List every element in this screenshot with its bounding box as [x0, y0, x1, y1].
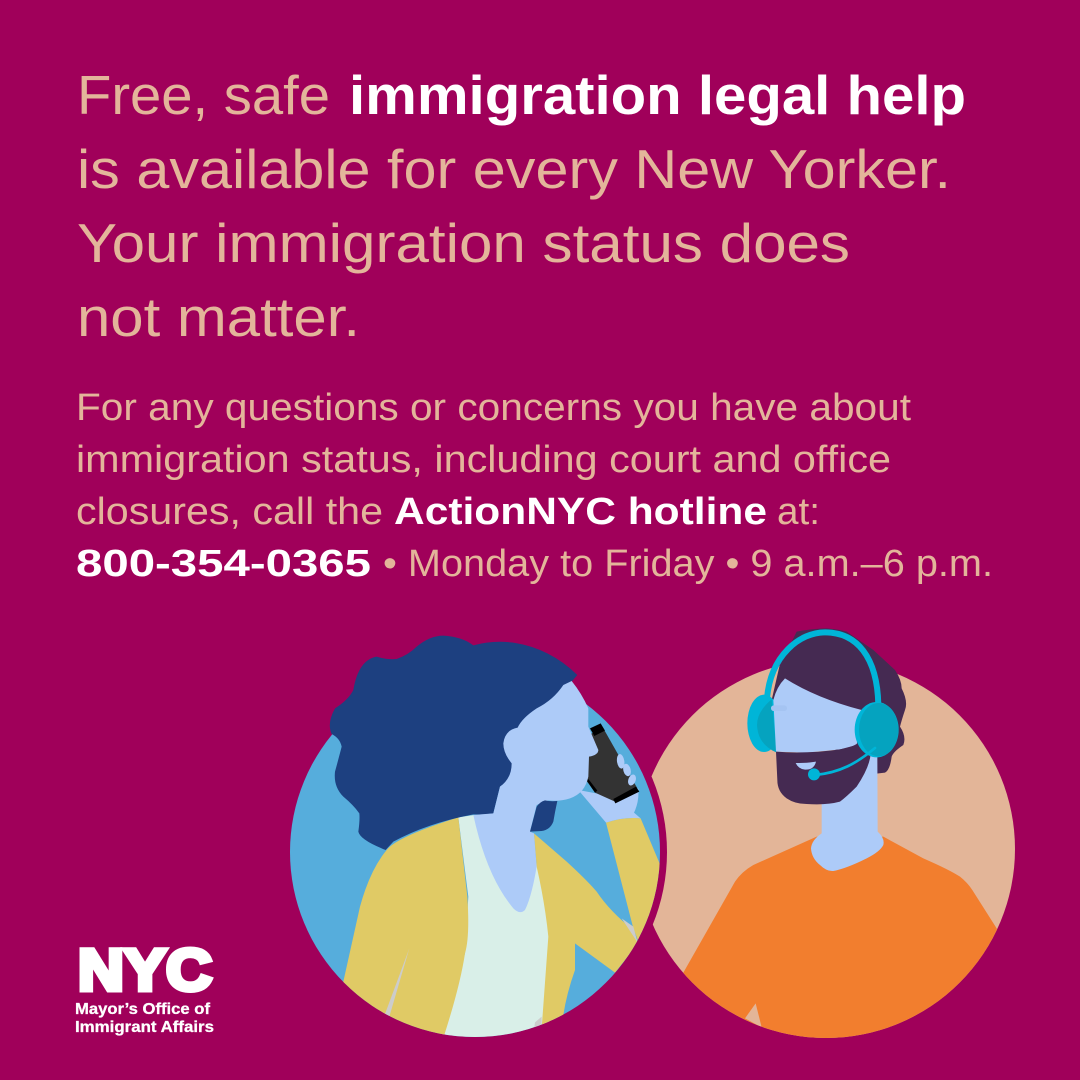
eyebrow detail: [771, 705, 787, 711]
headset: [767, 632, 899, 780]
collar hair: [530, 800, 557, 832]
headline: Free, safe: [77, 64, 330, 126]
hand: [578, 788, 641, 823]
left jacket panel: [343, 818, 468, 1034]
hotline details text block: • Monday to Friday • 9 a.m.–6 p.m.: [383, 543, 993, 585]
NYC Mayor's Office of Immigrant Affairs logo: [75, 938, 214, 1036]
fingers: [616, 754, 637, 787]
hotline details text block: closures, call the: [76, 491, 383, 533]
orange shirt: [683, 836, 997, 1038]
infographic canvas: [76, 74, 1015, 1038]
phone: [586, 723, 639, 803]
headline: immigration legal help: [349, 64, 966, 126]
hair: [330, 636, 577, 850]
maroon ring separating the circles: [283, 660, 667, 1044]
hotline details text block: 800-354-0365: [76, 543, 371, 585]
headline: not matter.: [77, 286, 360, 348]
hotline details text block: [76, 387, 993, 585]
face: [773, 678, 862, 753]
headline: [77, 64, 966, 348]
illustration: woman on phone: [290, 636, 662, 1053]
hotline details text block: at:: [777, 491, 820, 533]
hotline details text block: For any questions or concerns you have about: [76, 387, 911, 429]
NYC Mayor's Office of Immigrant Affairs logo: NYC: [78, 938, 212, 1003]
right jacket panel: [534, 833, 638, 1028]
neck and face: [473, 681, 598, 912]
beard: [776, 742, 871, 804]
left ear cup: [747, 695, 781, 753]
NYC Mayor's Office of Immigrant Affairs logo: Immigrant Affairs: [75, 1019, 214, 1036]
hotline details text block: ActionNYC hotline: [394, 491, 767, 533]
illustration: man with headset: [652, 628, 1015, 1038]
headline: is available for every New Yorker.: [77, 138, 951, 200]
neck: [811, 755, 884, 871]
hair: [772, 628, 906, 774]
mouth: [796, 762, 816, 770]
headline: Your immigration status does: [77, 212, 850, 274]
raised sleeve: [606, 818, 662, 942]
hotline details text block: immigration status, including court and office: [76, 439, 891, 481]
NYC Mayor's Office of Immigrant Affairs logo: Mayor’s Office of: [75, 1001, 211, 1018]
undershirt: [442, 815, 550, 1037]
